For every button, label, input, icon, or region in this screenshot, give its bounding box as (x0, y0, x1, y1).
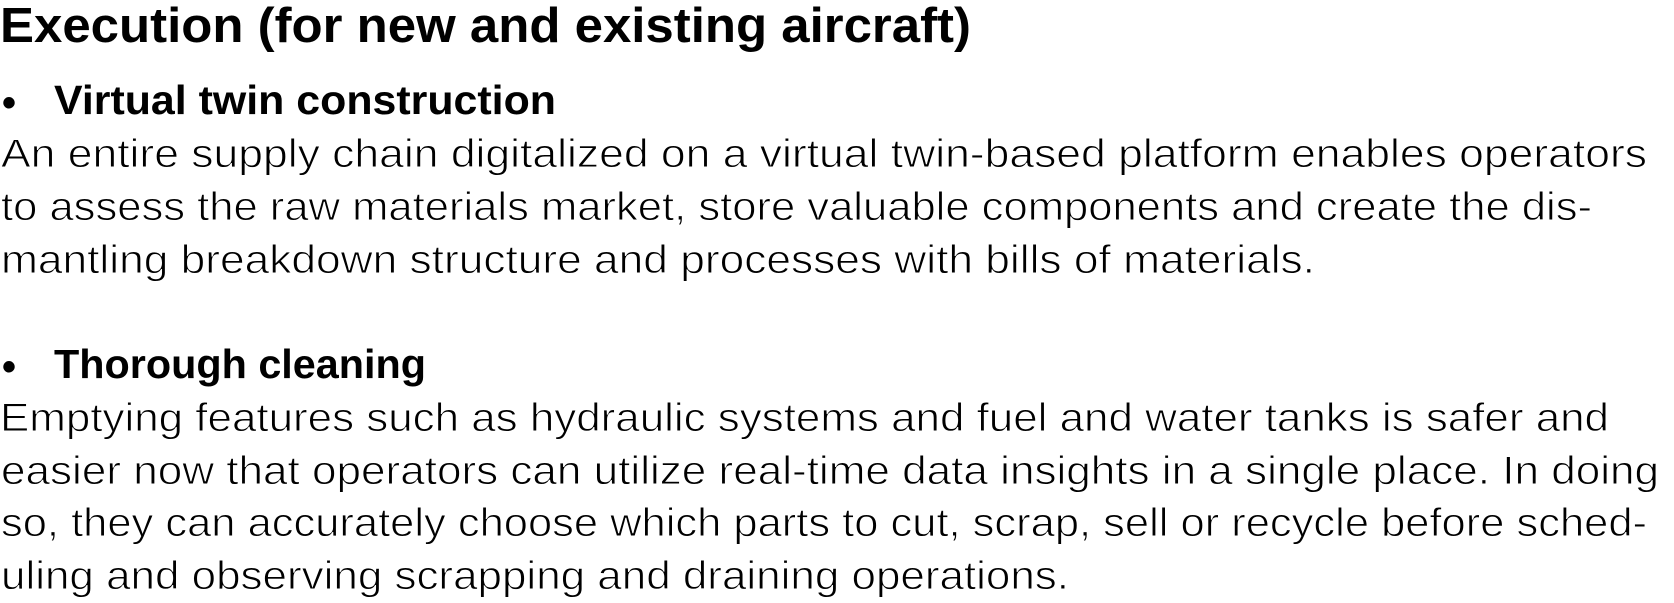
paragraph: to assess the raw materials market, store valuable components and create the dis- (1, 185, 1592, 229)
paragraph: so, they can accurately choose which parts to cut, scrap, sell or recycle before sched- (1, 501, 1647, 545)
paragraph: An entire supply chain digitalized on a virtual twin-based platform enables operators (1, 132, 1647, 176)
bullet: • (2, 345, 16, 389)
paragraph: mantling breakdown structure and processes with bills of materials. (1, 238, 1315, 282)
paragraph (0, 396, 1659, 598)
paragraph: Emptying features such as hydraulic systems and fuel and water tanks is safer and (0, 396, 1609, 440)
bullet: • (2, 81, 16, 125)
paragraph: uling and observing scrapping and draining operations. (1, 554, 1069, 598)
section: virtual twin construction (1, 77, 1647, 282)
subheading: Thorough cleaning (54, 341, 426, 387)
paragraph (1, 132, 1647, 282)
title: Execution (for new and existing aircraft) (0, 0, 971, 53)
subheading: Virtual twin construction (54, 77, 556, 123)
section: thorough cleaning (0, 341, 1659, 598)
paragraph: easier now that operators can utilize real-time data insights in a single place. In doing (1, 449, 1659, 493)
